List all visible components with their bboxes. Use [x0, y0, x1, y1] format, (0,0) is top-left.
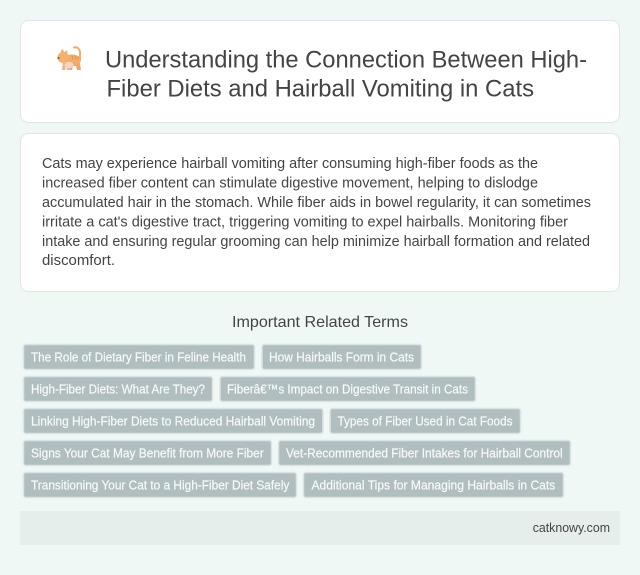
tag: linking diets to vomiting	[24, 408, 323, 434]
footer source text: catknowy.com	[533, 520, 610, 535]
tag: types of fiber: Types of Fiber Used in Cat Foods	[338, 413, 512, 428]
description text: discomfort.	[42, 253, 115, 269]
tag: additional tips: Additional Tips for Managing Hairballs in Cats	[312, 477, 555, 492]
tag: high-fiber diets	[24, 376, 212, 402]
tag: digestive transit: Fiberâ€™s Impact on Digestive Transit in Cats	[227, 381, 468, 396]
tag: high-fiber diets: High-Fiber Diets: What Are They?	[31, 381, 205, 396]
heading: important related terms: Important Related Terms	[232, 314, 408, 331]
related terms tags	[24, 344, 570, 498]
tag: transitioning safely: Transitioning Your Cat to a High-Fiber Diet Safely	[31, 477, 290, 492]
title text: Fiber Diets and Hairball Vomiting in Cats	[106, 76, 534, 102]
icon: cat	[57, 47, 81, 70]
description text: irritate a cat's digestive tract, triggering vomiting to expel hairballs. Monitoring fiber	[42, 214, 568, 230]
tag: signs your cat may benefit	[24, 440, 272, 466]
description text: intake and ensuring regular grooming can help minimize hairball formation and related	[42, 234, 590, 250]
tag: vet-recommended intakes	[278, 440, 570, 466]
title text: Understanding the Connection Between High-	[105, 46, 587, 74]
tag: additional tips	[304, 472, 564, 498]
panel: title card	[20, 20, 620, 122]
tag: signs your cat may benefit: Signs Your Cat May Benefit from More Fiber	[31, 445, 264, 460]
tag: transitioning safely	[24, 472, 296, 498]
tag: role of dietary fiber: The Role of Dietary Fiber in Feline Health	[31, 349, 246, 364]
tag: digestive transit	[220, 376, 476, 402]
title text	[105, 46, 587, 102]
tag: types of fiber	[330, 408, 520, 434]
description text	[42, 156, 591, 269]
tag: how hairballs form	[262, 344, 422, 370]
panel: description	[20, 134, 620, 292]
footer	[20, 511, 620, 545]
tag: linking diets to vomiting: Linking High-Fiber Diets to Reduced Hairball Vomiting	[31, 413, 315, 428]
description text: accumulated hair in the stomach. While fiber aids in bowel regularity, it can sometimes	[42, 195, 591, 211]
tag: vet-recommended intakes: Vet-Recommended Fiber Intakes for Hairball Control	[286, 445, 563, 460]
description text: Cats may experience hairball vomiting after consuming high-fiber foods as the	[42, 156, 538, 172]
tag: how hairballs form: How Hairballs Form in Cats	[269, 349, 414, 364]
description text: increased fiber content can stimulate digestive movement, helping to dislodge	[42, 176, 538, 192]
tag: role of dietary fiber	[24, 344, 254, 370]
